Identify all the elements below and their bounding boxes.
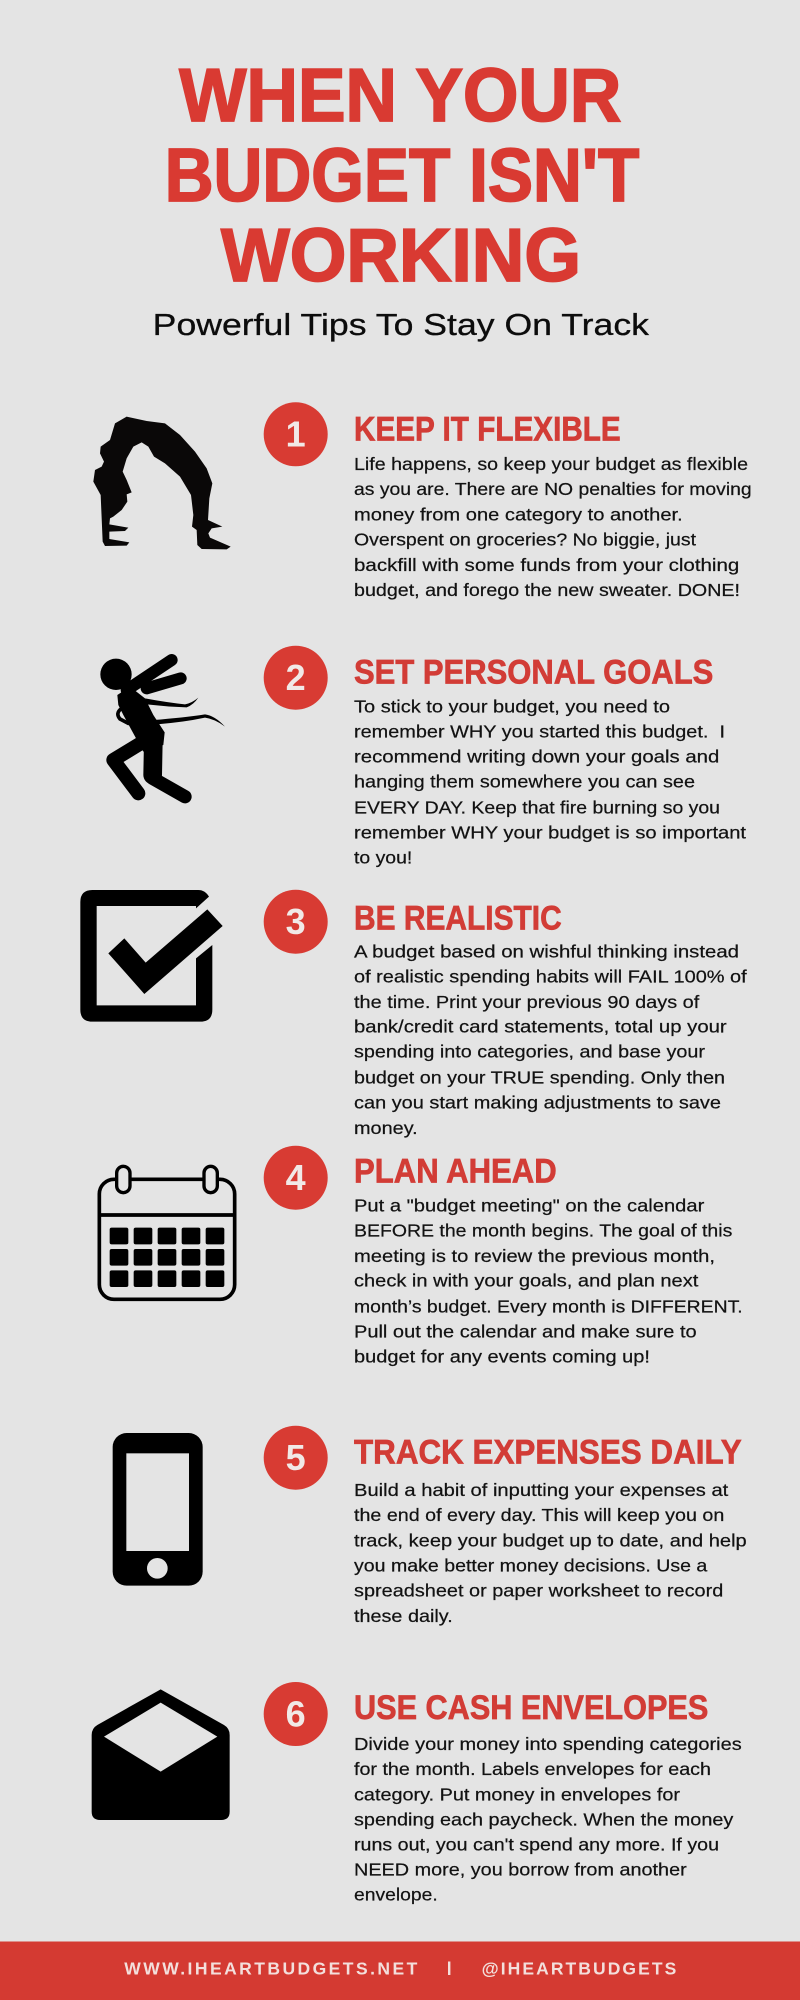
body text: spreadsheet or paper worksheet to record	[354, 1581, 723, 1601]
body text: month’s budget. Every month is DIFFERENT.	[354, 1297, 743, 1317]
body text	[354, 454, 752, 600]
body text: To stick to your budget, you need to	[354, 697, 670, 717]
website link: WWW.IHEARTBUDGETS.NET	[124, 1958, 418, 1978]
panel: step 6 use cash envelopes	[92, 1682, 742, 1905]
body text	[354, 1734, 742, 1905]
panel: step 1 keep it flexible	[93, 402, 752, 600]
number badge 6: 6	[286, 1694, 306, 1734]
heading: USE CASH ENVELOPES	[354, 1689, 708, 1727]
body text: budget on your TRUE spending. Only then	[354, 1068, 725, 1088]
body text: hanging them somewhere you can see	[354, 772, 695, 792]
icon: open envelope	[92, 1689, 230, 1820]
body text: spending into categories, and base your	[354, 1042, 705, 1062]
panel: step 3 be realistic	[80, 890, 747, 1138]
body text: to you!	[354, 848, 412, 868]
title: WORKING	[221, 213, 581, 297]
panel: step 5 track expenses daily	[113, 1426, 747, 1626]
body text: BEFORE the month begins. The goal of this	[354, 1221, 733, 1241]
heading: KEEP IT FLEXIBLE	[354, 411, 621, 449]
number badge 4: 4	[286, 1157, 306, 1198]
body text: recommend writing down your goals and	[354, 747, 719, 767]
body text: A budget based on wishful thinking instead	[354, 942, 739, 962]
body text: Divide your money into spending categories	[354, 1734, 742, 1754]
body text: envelope.	[354, 1885, 438, 1905]
body text: the time. Print your previous 90 days of	[354, 992, 699, 1012]
body text: of realistic spending habits will FAIL 100% of	[354, 967, 747, 987]
body text: remember WHY your budget is so important	[354, 823, 746, 843]
social handle: @IHEARTBUDGETS	[482, 1958, 676, 1978]
body text: can you start making adjustments to save	[354, 1093, 721, 1113]
body text: runs out, you can't spend any more. If you	[354, 1835, 719, 1855]
body text: budget, and forego the new sweater. DONE!	[354, 580, 740, 600]
number badge 5	[264, 1426, 328, 1490]
footer bar	[0, 1942, 800, 2000]
body text	[354, 1196, 743, 1367]
title	[165, 53, 639, 297]
heading: PLAN AHEAD	[354, 1153, 557, 1191]
icon: checkbox with check mark	[80, 890, 223, 1022]
body text	[354, 697, 746, 868]
body text: you make better money decisions. Use a	[354, 1556, 708, 1576]
body text: bank/credit card statements, total up your	[354, 1017, 727, 1037]
icon: running figure with ribbons	[100, 659, 225, 797]
subtitle: Powerful Tips To Stay On Track	[153, 307, 650, 342]
body text: the end of every day. This will keep you on	[354, 1505, 724, 1525]
body text: Put a "budget meeting" on the calendar	[354, 1196, 705, 1216]
heading: SET PERSONAL GOALS	[354, 653, 713, 691]
body text: track, keep your budget up to date, and help	[354, 1531, 747, 1551]
icon: smartphone	[113, 1433, 203, 1586]
panel: step 2 set personal goals	[100, 646, 746, 868]
body text: remember WHY you started this budget. I	[354, 722, 725, 742]
body text: category. Put money in envelopes for	[354, 1785, 680, 1805]
number badge 2	[264, 646, 328, 710]
body text: money from one category to another.	[354, 505, 683, 525]
title: BUDGET ISN'T	[165, 133, 639, 217]
heading: BE REALISTIC	[354, 899, 562, 937]
body text	[354, 942, 747, 1138]
number badge 3: 3	[286, 901, 306, 942]
body text: check in with your goals, and plan next	[354, 1271, 698, 1291]
number badge 1: 1	[286, 414, 306, 454]
body text: budget for any events coming up!	[354, 1347, 650, 1367]
body text: EVERY DAY. Keep that fire burning so you	[354, 797, 720, 817]
body text: backfill with some funds from your clothing	[354, 555, 739, 575]
number badge 1	[264, 402, 328, 466]
icon: yoga backbend silhouette	[93, 417, 231, 549]
body text: for the month. Labels envelopes for each	[354, 1759, 711, 1779]
number badge 4	[264, 1146, 328, 1210]
body text: NEED more, you borrow from another	[354, 1860, 687, 1880]
body text: money.	[354, 1118, 418, 1138]
body text: spending each paycheck. When the money	[354, 1810, 734, 1830]
title: WHEN YOUR	[179, 53, 621, 137]
body text	[354, 1480, 747, 1626]
body text: Build a habit of inputting your expenses at	[354, 1480, 728, 1500]
body text: meeting is to review the previous month,	[354, 1246, 715, 1266]
body text: these daily.	[354, 1606, 453, 1626]
number badge 3	[264, 890, 328, 954]
body text: Pull out the calendar and make sure to	[354, 1322, 697, 1342]
heading: TRACK EXPENSES DAILY	[354, 1433, 742, 1471]
separator	[448, 1962, 450, 1975]
body text: as you are. There are NO penalties for moving	[354, 479, 752, 499]
icon: calendar	[99, 1166, 235, 1299]
body text: Overspent on groceries? No biggie, just	[354, 530, 696, 550]
body text: Life happens, so keep your budget as flexible	[354, 454, 748, 474]
panel: step 4 plan ahead	[99, 1146, 743, 1367]
number badge 5: 5	[286, 1437, 306, 1478]
number badge 2: 2	[286, 657, 306, 698]
number badge 6	[264, 1682, 328, 1746]
